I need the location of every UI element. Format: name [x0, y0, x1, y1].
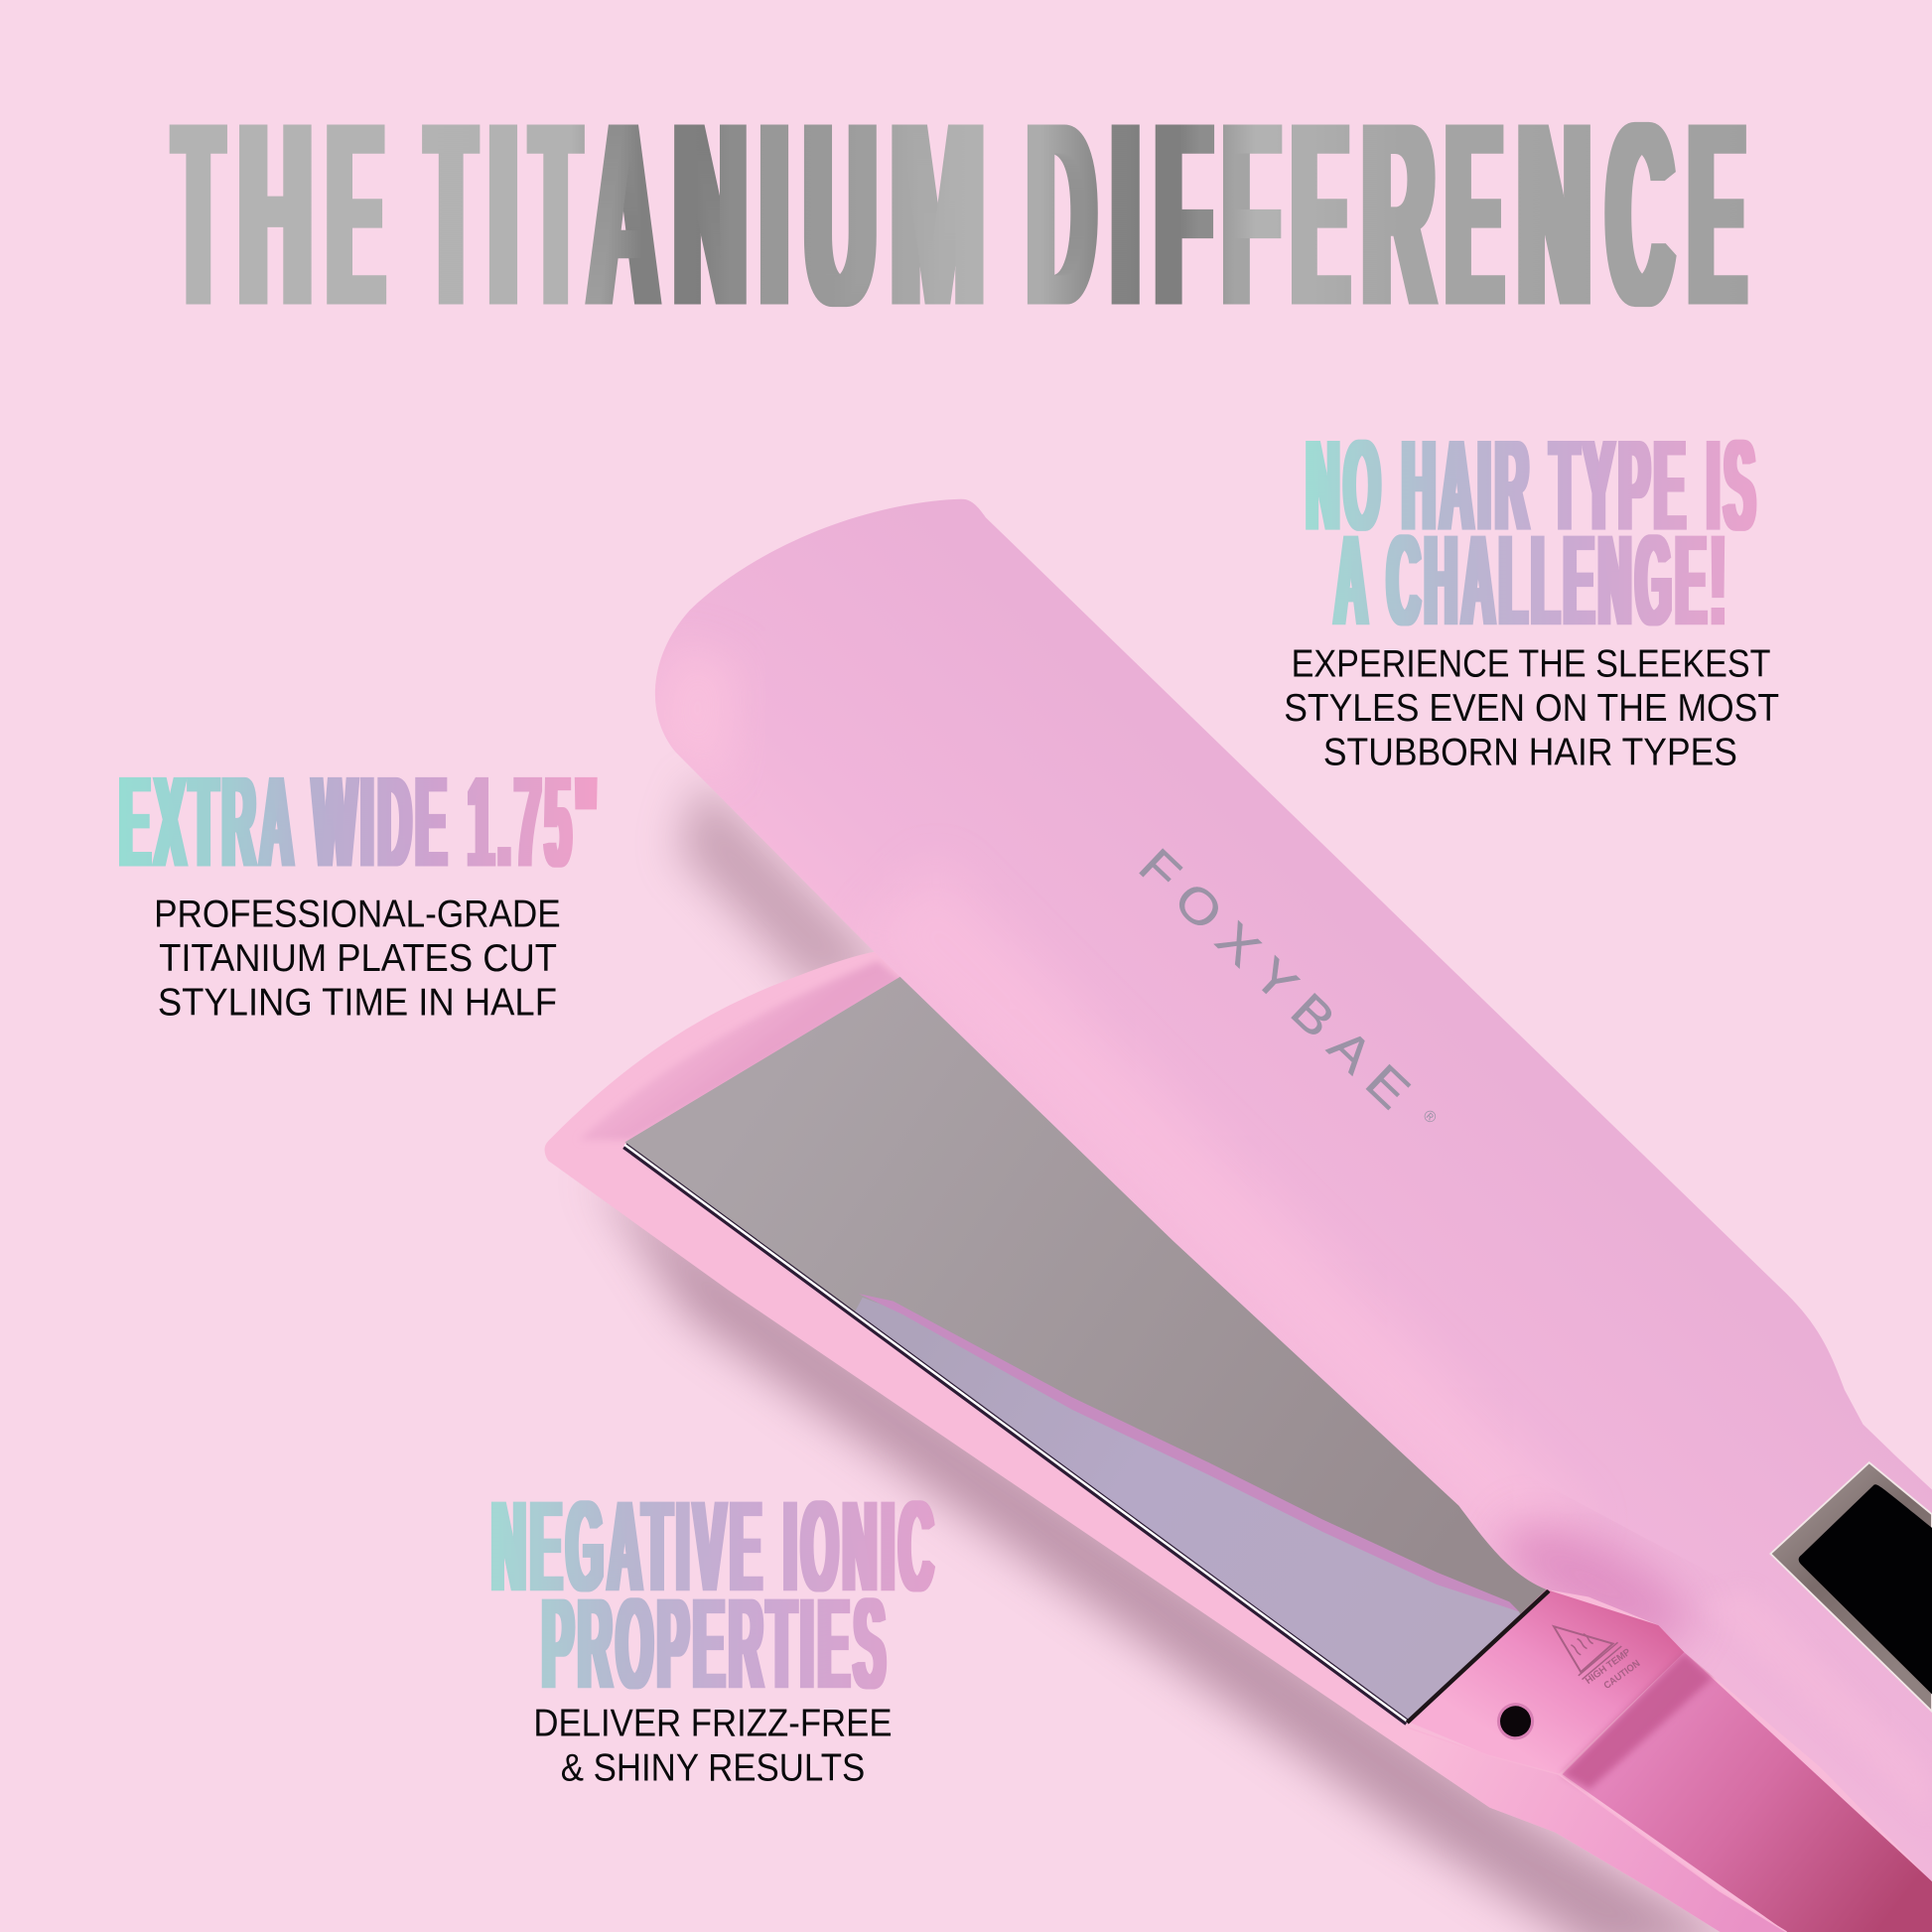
callout: no hair type: [1284, 413, 1779, 774]
body text: STYLING TIME IN HALF: [158, 982, 557, 1025]
shadow under upper arm: [678, 778, 894, 992]
text: EXTRA WIDE 1.75": [119, 749, 602, 894]
display screen: [1799, 1484, 1932, 1694]
hinge dark band: [1563, 1652, 1713, 1789]
title: I: [1112, 69, 1139, 360]
body text: PROFESSIONAL-GRADE: [154, 893, 561, 935]
display bezel: [1770, 1462, 1932, 1712]
lower arm top rim: [579, 961, 905, 1140]
text: E: [1690, 69, 1744, 360]
shadow on arm near hinge: [1489, 1507, 1700, 1650]
lower arm tail band: [1355, 1717, 1787, 1932]
text: PROPERTIES: [542, 1571, 890, 1716]
title: N: [674, 69, 746, 360]
body text: STUBBORN HAIR TYPES: [1323, 732, 1737, 774]
product: flat iron hair straightener: [545, 469, 1932, 1932]
title: M: [892, 69, 984, 360]
body text: STYLES EVEN ON THE MOST: [1284, 687, 1779, 730]
body text: & SHINY RESULTS: [561, 1746, 865, 1789]
upper arm: [617, 469, 1932, 1932]
title: C: [1608, 69, 1672, 360]
body text: TITANIUM PLATES CUT: [159, 937, 557, 980]
icon: high temp caution: [1554, 1626, 1642, 1692]
title: E: [1294, 69, 1347, 360]
seam line: [1407, 1727, 1787, 1932]
title: H: [239, 69, 311, 360]
title: E: [1448, 69, 1501, 360]
title: A: [590, 69, 657, 360]
body text: EXPERIENCE THE SLEEKEST: [1292, 642, 1770, 685]
logo: FOXYBAE: [1129, 838, 1431, 1129]
plate edge: [624, 1145, 1549, 1723]
body text: [1284, 642, 1779, 774]
ceramic plate: [625, 977, 1547, 1720]
icon: high temp caution: CAUTION: [1602, 1658, 1642, 1692]
lower arm: [545, 951, 1932, 1932]
callout: negative ionic: [491, 1473, 937, 1789]
shadow under lower arm: [592, 1171, 1749, 1932]
heading: [1307, 413, 1759, 652]
title: F: [1157, 69, 1210, 360]
title: U: [805, 69, 876, 360]
callout: extra wide: [119, 749, 602, 1025]
lower lit band: [863, 863, 1589, 1565]
title: F: [1224, 69, 1279, 360]
end-cap highlight: [683, 669, 717, 735]
right handle highlight: [1701, 1589, 1932, 1824]
body text: DELIVER FRIZZ-FREE: [533, 1703, 893, 1745]
title: I: [489, 69, 517, 360]
text: NEGATIVE IONIC: [491, 1473, 937, 1618]
hinge panel: [1407, 1589, 1685, 1774]
heading: [491, 1473, 937, 1716]
title: E: [329, 69, 382, 360]
title: T: [533, 69, 579, 360]
inner handle recess: [1563, 1652, 1932, 1932]
title: T: [428, 69, 474, 360]
title: R: [1363, 69, 1434, 360]
logo: ®: [1419, 1106, 1441, 1128]
body text: [154, 893, 561, 1025]
plate surface: [625, 977, 1547, 1624]
body text: [533, 1703, 893, 1789]
hole button: [1497, 1703, 1534, 1739]
title: N: [1519, 69, 1590, 360]
plate reflection: [850, 1298, 1528, 1722]
title: D: [1029, 69, 1095, 360]
icon: high temp caution: HIGH TEMP: [1584, 1646, 1633, 1687]
title: I: [760, 69, 788, 360]
pink reflection streak: [859, 1294, 1519, 1611]
title: T: [176, 69, 221, 360]
